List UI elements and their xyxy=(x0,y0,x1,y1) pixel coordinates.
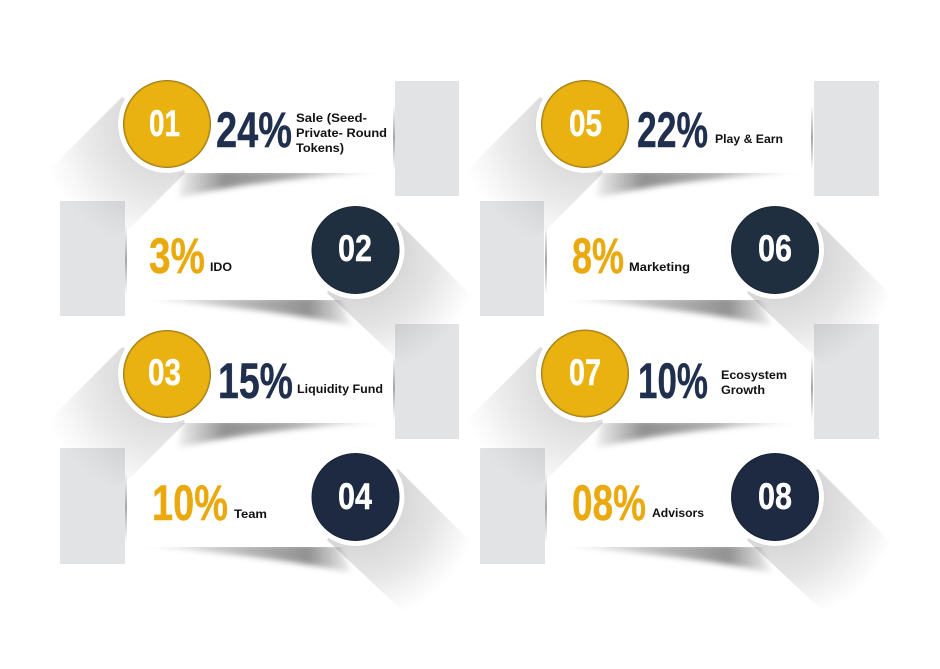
label: Play & Earn: Play & Earn xyxy=(715,132,783,146)
number badge: 04: 04 xyxy=(338,476,372,517)
shadows: card 02 xyxy=(125,222,480,395)
folded tab: card 05 xyxy=(814,81,879,196)
label: Team: Team xyxy=(234,507,267,521)
number badge: 06 xyxy=(726,201,824,299)
percentage: 22%: 22% xyxy=(637,102,708,158)
number badge: 01 xyxy=(118,75,216,173)
card 08: Advisors 08% xyxy=(480,448,900,642)
label: Sale (Seed-Private- Round Tokens): Tokens) xyxy=(296,141,344,155)
percentage: 8%: 8% xyxy=(572,228,624,284)
label: Ecosystem Growth: Ecosystem xyxy=(721,368,787,382)
folded tab: card 01 xyxy=(395,81,459,196)
number badge: 07: 07 xyxy=(569,352,601,393)
folded tab: card 04 xyxy=(60,448,125,564)
folded tab: card 06 xyxy=(480,201,544,316)
percentage: 10%: 10% xyxy=(152,475,228,531)
label: Advisors: Advisors xyxy=(652,506,704,520)
number badge: 05: 05 xyxy=(569,103,602,144)
card 06: Marketing 8% xyxy=(480,201,900,395)
card 05: Play & Earn 22% xyxy=(458,75,879,262)
percentage: 08%: 08% xyxy=(572,475,646,531)
number badge: 07 xyxy=(536,324,634,422)
shadows: card 05 xyxy=(458,97,813,262)
percentage: 24%: 24% xyxy=(216,102,292,158)
card 03: Liquidity Fund 15% xyxy=(40,324,459,512)
number badge: 02: 02 xyxy=(338,228,372,269)
folded tab: card 08 xyxy=(480,448,545,564)
number badge: 08: 08 xyxy=(758,476,792,517)
number badge: 06: 06 xyxy=(758,228,792,269)
label: Liquidity Fund: Liquidity Fund xyxy=(297,382,383,396)
label: Ecosystem Growth: Growth xyxy=(721,383,765,397)
label: Sale (Seed-Private- Round Tokens): Sale (Seed- xyxy=(296,111,367,125)
shadows: card 08 xyxy=(545,469,900,642)
percentage: 10%: 10% xyxy=(638,353,708,409)
number badge: 04 xyxy=(306,448,404,546)
number badge: 03: 03 xyxy=(148,352,181,393)
folded tab: card 02 xyxy=(60,201,125,316)
number badge: 02 xyxy=(306,201,404,299)
label: Sale (Seed-Private- Round Tokens) xyxy=(296,111,387,155)
shadows: card 04 xyxy=(125,469,480,642)
card 04: Team 10% xyxy=(60,448,480,642)
card 07: Ecosystem Growth 10% xyxy=(458,324,879,512)
folded tab: card 03 xyxy=(395,324,459,439)
label: Ecosystem Growth xyxy=(721,368,787,397)
number badge: 08 xyxy=(726,448,824,546)
label: IDO: IDO xyxy=(210,260,232,274)
label: Marketing: Marketing xyxy=(629,260,690,274)
number badge: 01: 01 xyxy=(149,103,180,144)
label: Sale (Seed-Private- Round Tokens): Private- Round xyxy=(296,126,387,140)
percentage: 15%: 15% xyxy=(218,353,293,409)
shadows: card 06 xyxy=(545,222,900,395)
number badge: 03 xyxy=(118,325,216,423)
shadows: card 07 xyxy=(458,347,813,512)
number badge: 05 xyxy=(536,75,634,173)
percentage: 3%: 3% xyxy=(149,228,205,284)
card 02: IDO 3% xyxy=(60,201,480,395)
shadows: card 03 xyxy=(40,347,395,512)
shadows: card 01 xyxy=(40,97,395,262)
folded tab: card 07 xyxy=(814,324,879,439)
card 01: Sale 24% xyxy=(40,75,459,262)
